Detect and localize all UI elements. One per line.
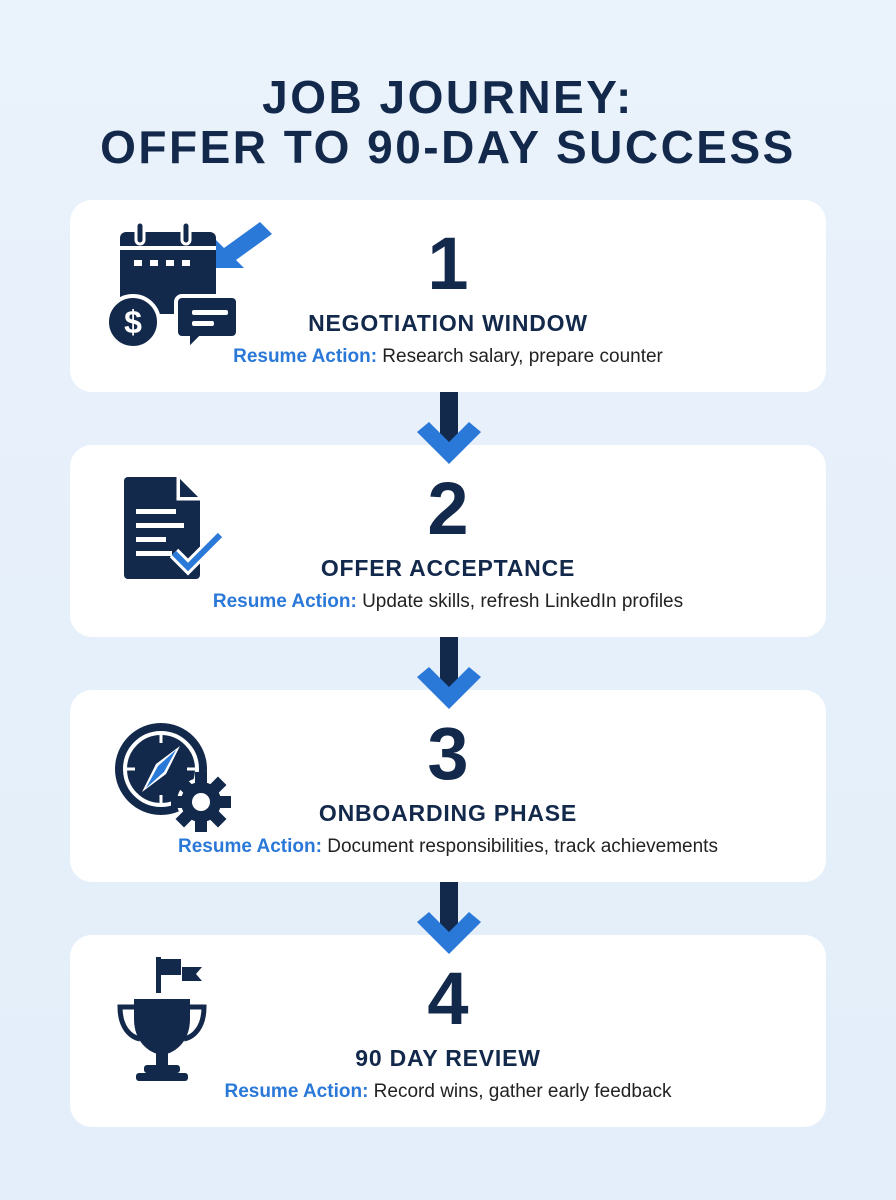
- icon: document check: [124, 477, 222, 579]
- resume action: Resume Action: Research salary, prepare counter: [233, 346, 663, 367]
- panel: step 2: [70, 445, 826, 637]
- arrow 2: [417, 637, 481, 709]
- panel: step 3: [70, 690, 826, 882]
- number 3: 3: [427, 712, 469, 795]
- icon: trophy flag: [118, 957, 206, 1081]
- heading: ONBOARDING PHASE: [319, 800, 577, 826]
- icon: calendar money chat: $: [124, 304, 142, 340]
- panel: step 1: [70, 200, 826, 392]
- title: OFFER TO 90-DAY SUCCESS: [100, 121, 796, 173]
- number 2: 2: [427, 467, 469, 550]
- heading: NEGOTIATION WINDOW: [308, 310, 588, 336]
- arrow 3: [417, 882, 481, 954]
- arrow 1: [417, 392, 481, 464]
- icon: compass gear: [115, 723, 231, 832]
- resume action: Resume Action: Update skills, refresh LinkedIn profiles: [213, 591, 683, 612]
- title: JOB JOURNEY:: [262, 71, 634, 123]
- title: [100, 71, 796, 173]
- icon: calendar money chat: [109, 222, 272, 346]
- panel: step 4: [70, 935, 826, 1127]
- number 1: 1: [427, 222, 469, 305]
- heading: 90 DAY REVIEW: [355, 1045, 541, 1071]
- number 4: 4: [427, 957, 469, 1040]
- resume action: Resume Action: Document responsibilities, track achievements: [178, 836, 718, 857]
- resume action: Resume Action: Record wins, gather early feedback: [224, 1081, 672, 1102]
- heading: OFFER ACCEPTANCE: [321, 555, 575, 581]
